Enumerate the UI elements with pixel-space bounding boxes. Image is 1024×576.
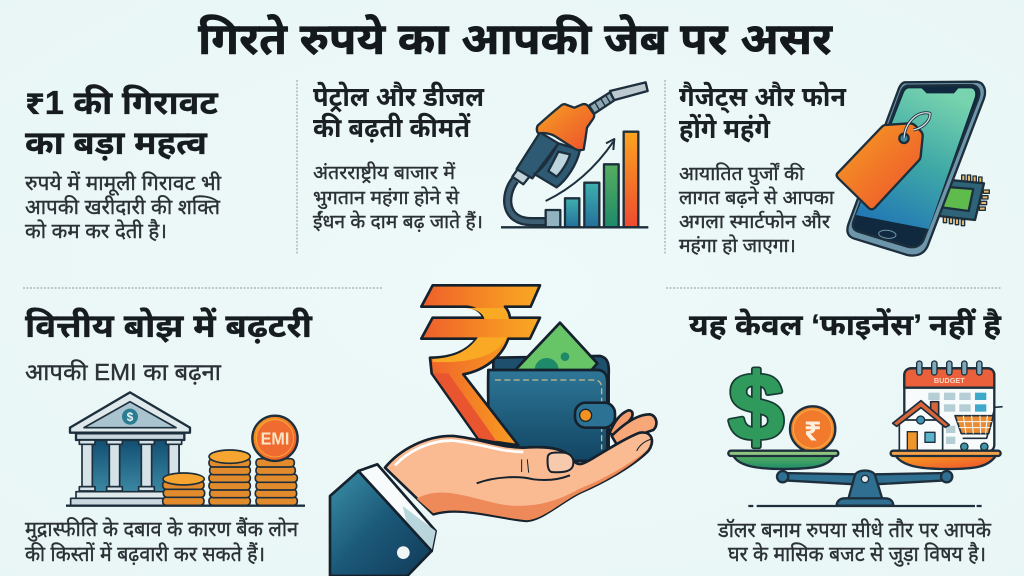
text: rupee fall description [25,171,222,243]
heading: petrol diesel: पेट्रोल और डीजल [313,81,485,113]
heading: gadgets: होंगे महंगे [679,113,771,144]
text: rupee fall description: रुपये में मामूली गिरावट भी [25,171,222,196]
heading: financial burden: वित्तीय बोझ में बढ़टरी [25,307,313,344]
icon: house [893,401,949,451]
heading: rupee fall [25,84,219,161]
icon: dollar sign: $ [729,355,784,461]
text: household budget description: घर के मासिक बजट से जुड़ा विषय है। [728,541,986,567]
icon: shopping cart [955,407,1003,450]
panel: rupee fall importance [25,84,222,243]
panel: not just finance [689,307,1003,567]
icon: rupee coin: ₹ [804,413,821,447]
heading: petrol diesel [313,81,485,143]
text: gadgets description: लागत बढ़ने से आपका [679,186,835,209]
icon: rupee symbol [421,285,540,445]
text: petrol description: ईंधन के दाम बढ़ जाते हैं। [313,210,483,233]
icon: budget calendar: BUDGET [934,376,965,385]
subheading: EMI rise: आपकी EMI का बढ़ना [25,359,222,385]
text: rupee fall description: आपकी खरीदारी की शक्ति [25,195,221,219]
text: burden description: मुद्रास्फीति के दबाव के कारण बैंक लोन [25,517,298,542]
panel: petrol and diesel [313,81,648,233]
text: petrol description: भुगतान महंगा होने से [313,186,460,210]
text: gadgets description [679,162,835,257]
text: burden description: की किस्तों में बढ़वारी कर सकते हैं। [25,542,265,566]
icon: hand [385,432,653,521]
icon: fuel nozzle with rising bar chart [501,82,648,227]
icon: back fingers [609,410,656,444]
icon: bank building with coin stacks: $ [127,410,134,424]
text: household budget description: डॉलर बनाम रुपया सीधे तौर पर आपके [717,518,992,542]
icon: dollar sign: $ [729,355,784,461]
icon: balance scale with dollar, rupee and household budget [728,355,1003,506]
icon: budget calendar [904,361,994,452]
heading: not just finance: यह केवल ‘फाइनेंस’ नहीं है [689,307,1002,342]
text: burden description [25,517,298,566]
icon: bank building with coin stacks [66,392,305,506]
illustration: hand holding wallet and rupee symbol [330,285,656,576]
heading: petrol diesel: की बढ़ती कीमतें [313,112,471,143]
heading: gadgets: गैजेट्स और फोन [679,81,847,114]
icon: phone with price tag and chip [837,82,989,256]
text: petrol description [313,161,483,233]
panel: financial burden [25,307,313,566]
title: गिरते रुपये का आपकी जेब पर असर [198,13,834,64]
icon: wallet [488,323,615,461]
text: petrol description: अंतरराष्ट्रीय बाजार में [313,161,456,184]
icon: rupee coin [790,406,835,452]
text: rupee fall description: को कम कर देती है। [25,218,167,243]
text: gadgets description: अगला स्मार्टफोन और [679,210,831,233]
heading: rupee fall: ₹1 की गिरावट [25,84,219,121]
icon: suit sleeve and cuff [330,464,436,576]
heading: rupee fall: का बड़ा महत्व [25,124,208,161]
heading: gadgets [679,81,847,144]
text: gadgets description: महंगा हो जाएगा। [679,235,796,257]
icon: bank building with coin stacks: EMI [261,429,289,449]
text: household budget description [717,518,992,567]
text: gadgets description: आयातित पुर्जों की [679,162,805,186]
panel: gadgets and phones [679,81,989,257]
